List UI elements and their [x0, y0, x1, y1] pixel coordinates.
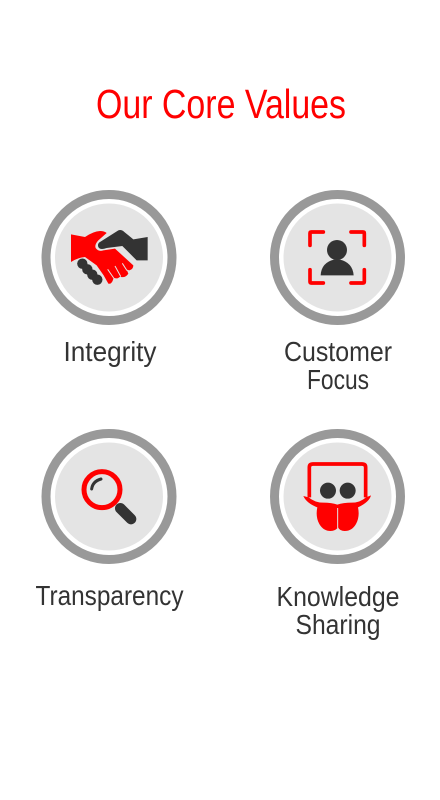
label: Customer Focus: Customer [284, 336, 392, 367]
badge: transparency [46, 434, 172, 560]
label: Integrity: Integrity [64, 336, 156, 367]
label: Knowledge Sharing: Knowledge [276, 581, 400, 612]
icon: person in focus frame [310, 232, 364, 283]
title: Our Core Values [96, 81, 346, 127]
label: Customer Focus: Focus [307, 364, 369, 395]
badge: customer focus [274, 194, 400, 320]
panel: integrity [46, 194, 172, 367]
label: Knowledge Sharing: Sharing [296, 609, 380, 640]
label: Customer Focus [284, 336, 392, 395]
icon: handshake [71, 230, 148, 285]
panel: transparency [36, 434, 184, 611]
panel: knowledge sharing [274, 434, 400, 640]
badge: integrity [46, 194, 172, 320]
badge: knowledge sharing [274, 434, 400, 560]
label: Transparency: Transparency [36, 580, 184, 611]
icon: slides logo [303, 464, 371, 531]
panel: customer focus [274, 194, 400, 395]
label: Knowledge Sharing [276, 581, 400, 640]
icon: magnifying glass [84, 472, 131, 519]
